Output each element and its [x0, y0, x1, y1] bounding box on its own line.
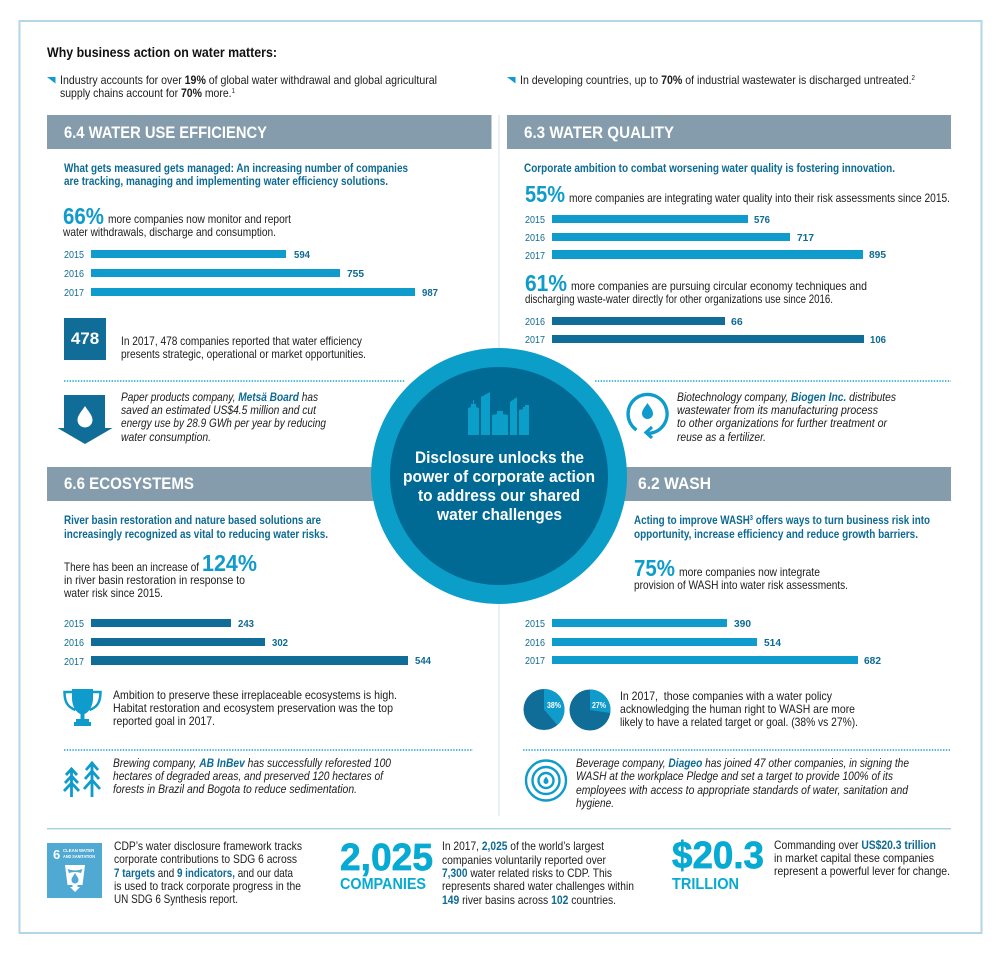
bar chart: circular economy: 2016 [525, 316, 545, 328]
case study: Biogen: Biotechnology company, Biogen Inc. distributes [677, 390, 896, 404]
text: 2,025 companies: companies voluntarily reported over [442, 853, 606, 867]
stat 66%: more companies now monitor and report [108, 212, 292, 226]
bar chart: river basin restoration: 2016 [64, 637, 84, 649]
bar chart: river basin restoration: 544 [415, 655, 431, 667]
bar chart: circular economy: 2017 [525, 334, 545, 346]
case study: Biogen: wastewater from its manufacturing process [677, 403, 878, 417]
section header 6.6: 6.6 ECOSYSTEMS [64, 475, 194, 493]
icon: city buildings [468, 392, 529, 435]
case study: AB InBev: hectares of degraded areas, and preserved 120 hectares of [113, 769, 384, 783]
intro: why business action matters [47, 45, 915, 100]
bar chart: water quality integration: 2016 [525, 232, 545, 244]
subheading 6.6 [64, 513, 328, 541]
section header 6.4: 6.4 WATER USE EFFICIENCY [64, 124, 267, 142]
icon: target with water drop [526, 760, 566, 800]
icon: SDG 6 clean water and sanitation: CLEAN WATER [63, 848, 95, 853]
icon: circular arrow with water drop [628, 394, 667, 438]
bullet: industrial wastewater: In developing countries, up to 70% of industrial wastewater is discharged untreated. [520, 73, 942, 87]
case study: Metsä Board: saved an estimated US$4.5 million and cut [121, 403, 317, 417]
section header 6.4 [47, 115, 492, 149]
case study: Metsä Board: water consumption. [121, 430, 211, 444]
stat 124% [63, 550, 257, 600]
stat 75% [634, 555, 848, 592]
bar chart: river basin restoration: 302 [272, 637, 288, 649]
bar chart: circular economy: 106 [870, 334, 886, 346]
stat 55%: 55% [525, 181, 565, 207]
stat 124%: There has been an increase of [64, 560, 200, 574]
icon: SDG 6 clean water and sanitation [47, 843, 102, 898]
subheading 6.4 [64, 161, 408, 188]
text: ambition: Habitat restoration and ecosystem preservation was the top [113, 701, 393, 715]
bar chart: water monitoring companies: 987 [422, 287, 438, 299]
case study: AB InBev: forests in Brazil and Bogota to reduce sedimentation. [113, 782, 357, 796]
case study: Diageo: employees with access to appropriate standards of water, sanitation and [576, 783, 908, 797]
bar chart: river basin restoration: 243 [238, 618, 254, 630]
subheading 6.2: 3 [750, 515, 753, 522]
case study: Diageo: hygiene. [576, 796, 614, 810]
bar chart: water monitoring companies [64, 249, 438, 299]
circle message text: power of corporate action [403, 467, 595, 486]
bar chart: water monitoring companies: 594 [294, 249, 310, 261]
subheading 6.3: Corporate ambition to combat worsening water quality is fostering innovation. [524, 161, 895, 175]
text: ambition: Ambition to preserve these irreplaceable ecosystems is high. [113, 688, 397, 702]
pie chart: 27%: 27% [592, 700, 606, 710]
bar chart: water quality integration: 895 [869, 249, 886, 261]
case study: Diageo: Beverage company, Diageo has joined 47 other companies, in signing the [576, 756, 909, 770]
case study: Metsä Board [121, 390, 326, 444]
bar chart: water quality integration: 2015 [525, 214, 545, 226]
bar chart: circular economy: 66 [731, 316, 743, 328]
subheading 6.6: River basin restoration and nature based solutions are [64, 513, 321, 527]
subheading 6.2: opportunity, increase efficiency and reduce growth barriers. [634, 527, 918, 541]
bar chart: WASH integration [525, 618, 881, 667]
text: 2,025 companies: represents shared water challenges within [442, 879, 634, 893]
icon: down arrow with water drop [58, 395, 112, 444]
bullet: industry water withdrawal [47, 73, 437, 100]
bullet: industrial wastewater: 2 [912, 75, 915, 82]
stat 66%: 66% [63, 203, 104, 229]
bar chart: water quality integration: 717 [797, 232, 814, 244]
text: 2,025 companies: 7,300 water related risks to CDP. This [442, 866, 612, 880]
text: SDG framework: UN SDG 6 Synthesis report. [114, 892, 238, 906]
stat: 2,025 companies: 2,025 [340, 837, 433, 879]
section header 6.3: 6.3 WATER QUALITY [524, 124, 674, 142]
text: SDG framework: CDP’s water disclosure framework tracks [114, 839, 302, 853]
stat: $20.3 trillion: $20.3 [672, 835, 764, 877]
pie chart: 38% [524, 689, 564, 730]
circle message text: water challenges [436, 505, 562, 524]
pie chart: 27% [570, 690, 611, 730]
bar chart: river basin restoration: 2015 [64, 618, 84, 630]
case study: Metsä Board: energy use by 28.9 GWh per year by reducing [121, 416, 326, 430]
bullet: industry water withdrawal: 1 [232, 88, 235, 95]
stat 66%: water withdrawals, discharge and consumption. [62, 225, 276, 239]
bar chart: WASH integration: 2016 [525, 637, 545, 649]
bar chart: WASH integration: 2015 [525, 618, 545, 630]
panel: 6.2 WASH [523, 467, 951, 810]
bar chart: WASH integration: 2017 [525, 655, 545, 667]
bullet: industry water withdrawal: supply chains account for 70% more. [60, 86, 236, 100]
case study: Diageo: WASH at the workplace Pledge and set a target to provide 100% of its [576, 769, 893, 783]
text: WASH policy: acknowledging the human right to WASH are more [620, 702, 855, 716]
text: market capital: represent a powerful lever for change. [774, 864, 950, 878]
text: SDG framework: is used to track corporate progress in the [114, 879, 301, 893]
stat 75%: 75% [634, 555, 675, 581]
icon: trophy [64, 689, 100, 726]
stat 61%: 61% [525, 270, 567, 296]
bar chart: water monitoring companies: 2016 [64, 268, 84, 280]
stat 61%: discharging waste-water directly for other organizations use since 2016. [525, 292, 833, 306]
text: WASH policy [620, 689, 858, 729]
text: WASH policy: In 2017, those companies with a water policy [620, 689, 832, 703]
subheading 6.2 [634, 513, 930, 541]
bar chart: WASH integration: 514 [764, 637, 781, 649]
callout: 478 companies [64, 318, 366, 361]
text: 2,025 companies [442, 839, 634, 907]
text: SDG framework [114, 839, 302, 906]
bar chart: water quality integration: 2017 [525, 250, 545, 262]
stat 61% [525, 270, 867, 306]
case study: Biogen: to other organizations for further treatment or [677, 416, 888, 430]
subheading 6.4: are tracking, managing and implementing water efficiency solutions. [64, 174, 388, 188]
text: SDG framework: corporate contributions to SDG 6 across [114, 852, 297, 866]
section header 6.2: 6.2 WASH [638, 475, 711, 493]
callout: 478 companies: 478 [71, 329, 99, 348]
text: market capital: in market capital these companies [774, 851, 934, 865]
pie chart: 38%: 38% [547, 700, 561, 710]
stat 66% [62, 203, 292, 239]
bar chart: river basin restoration [64, 618, 431, 668]
section header 6.6 [47, 467, 387, 501]
text: SDG framework: 7 targets and 9 indicators, and our data [114, 866, 293, 880]
stat 124%: 124% [202, 550, 257, 576]
case study: AB InBev [113, 756, 391, 796]
intro heading: Why business action on water matters: [47, 45, 277, 60]
callout: 478 companies: In 2017, 478 companies reported that water efficiency [121, 334, 362, 348]
stat 55% [525, 181, 950, 207]
subheading 6.4: What gets measured gets managed: An increasing number of companies [64, 161, 408, 175]
section header 6.3 [507, 115, 951, 149]
bar chart: water quality integration [525, 214, 886, 262]
bar chart: WASH integration: 390 [734, 618, 751, 630]
circle message text: Disclosure unlocks the [415, 448, 584, 467]
text: market capital: Commanding over US$20.3 trillion [774, 838, 936, 852]
central circle: disclosure message [371, 348, 627, 604]
bar chart: water quality integration: 576 [754, 214, 770, 226]
bar chart: water monitoring companies: 755 [347, 268, 364, 280]
subheading 6.2: Acting to improve WASH [634, 513, 775, 527]
stat 124%: water risk since 2015. [63, 586, 163, 600]
stat 61%: more companies are pursuing circular economy techniques and [571, 279, 867, 293]
stat: $20.3 trillion: TRILLION [672, 876, 739, 893]
icon: SDG 6 clean water and sanitation: AND SANITATION [63, 854, 95, 859]
stat 75%: more companies now integrate [679, 565, 820, 579]
bar chart: river basin restoration: 2017 [64, 656, 84, 668]
footer section [47, 835, 950, 907]
text: ambition: reported goal in 2017. [113, 714, 215, 728]
case study: Diageo [576, 756, 909, 810]
stat 75%: provision of WASH into water risk assessments. [634, 578, 848, 592]
text: 2,025 companies: 149 river basins across 102 countries. [442, 893, 616, 907]
case study: Biogen [677, 390, 896, 444]
icon: trees [64, 762, 100, 797]
icon: SDG 6 clean water and sanitation: 6 [53, 847, 60, 862]
text: 2,025 companies: In 2017, 2,025 of the world’s largest [442, 839, 605, 853]
bar chart: circular economy [525, 316, 886, 346]
bar chart: water monitoring companies: 2015 [64, 249, 84, 261]
text: ambition [113, 688, 397, 728]
text: market capital [774, 838, 950, 878]
text: WASH policy: likely to have a related target or goal. (38% vs 27%). [620, 715, 858, 729]
case study: Metsä Board: Paper products company, Metsä Board has [121, 390, 318, 404]
bullet: industry water withdrawal: Industry accounts for over 19% of global water withdrawal and global agricultural [60, 73, 437, 87]
circle message text [403, 448, 595, 524]
callout: 478 companies: presents strategic, operational or market opportunities. [121, 347, 366, 361]
subheading 6.2: offers ways to turn business risk into [753, 513, 930, 527]
stat: 2,025 companies: COMPANIES [340, 876, 426, 893]
bar chart: WASH integration: 682 [864, 655, 881, 667]
case study: AB InBev: Brewing company, AB InBev has successfully reforested 100 [113, 756, 391, 770]
section header 6.2 [610, 467, 951, 501]
panel: 6.3 water quality [507, 115, 951, 444]
case study: Biogen: reuse as a fertilizer. [677, 430, 766, 444]
circle message text: to address our shared [418, 486, 580, 505]
bar chart: water monitoring companies: 2017 [64, 287, 84, 299]
subheading 6.6: increasingly recognized as vital to reducing water risks. [64, 527, 328, 541]
stat 124%: in river basin restoration in response to [64, 573, 245, 587]
panel: 6.4 water use efficiency [47, 115, 492, 444]
panel: 6.6 ecosystems [47, 467, 473, 797]
